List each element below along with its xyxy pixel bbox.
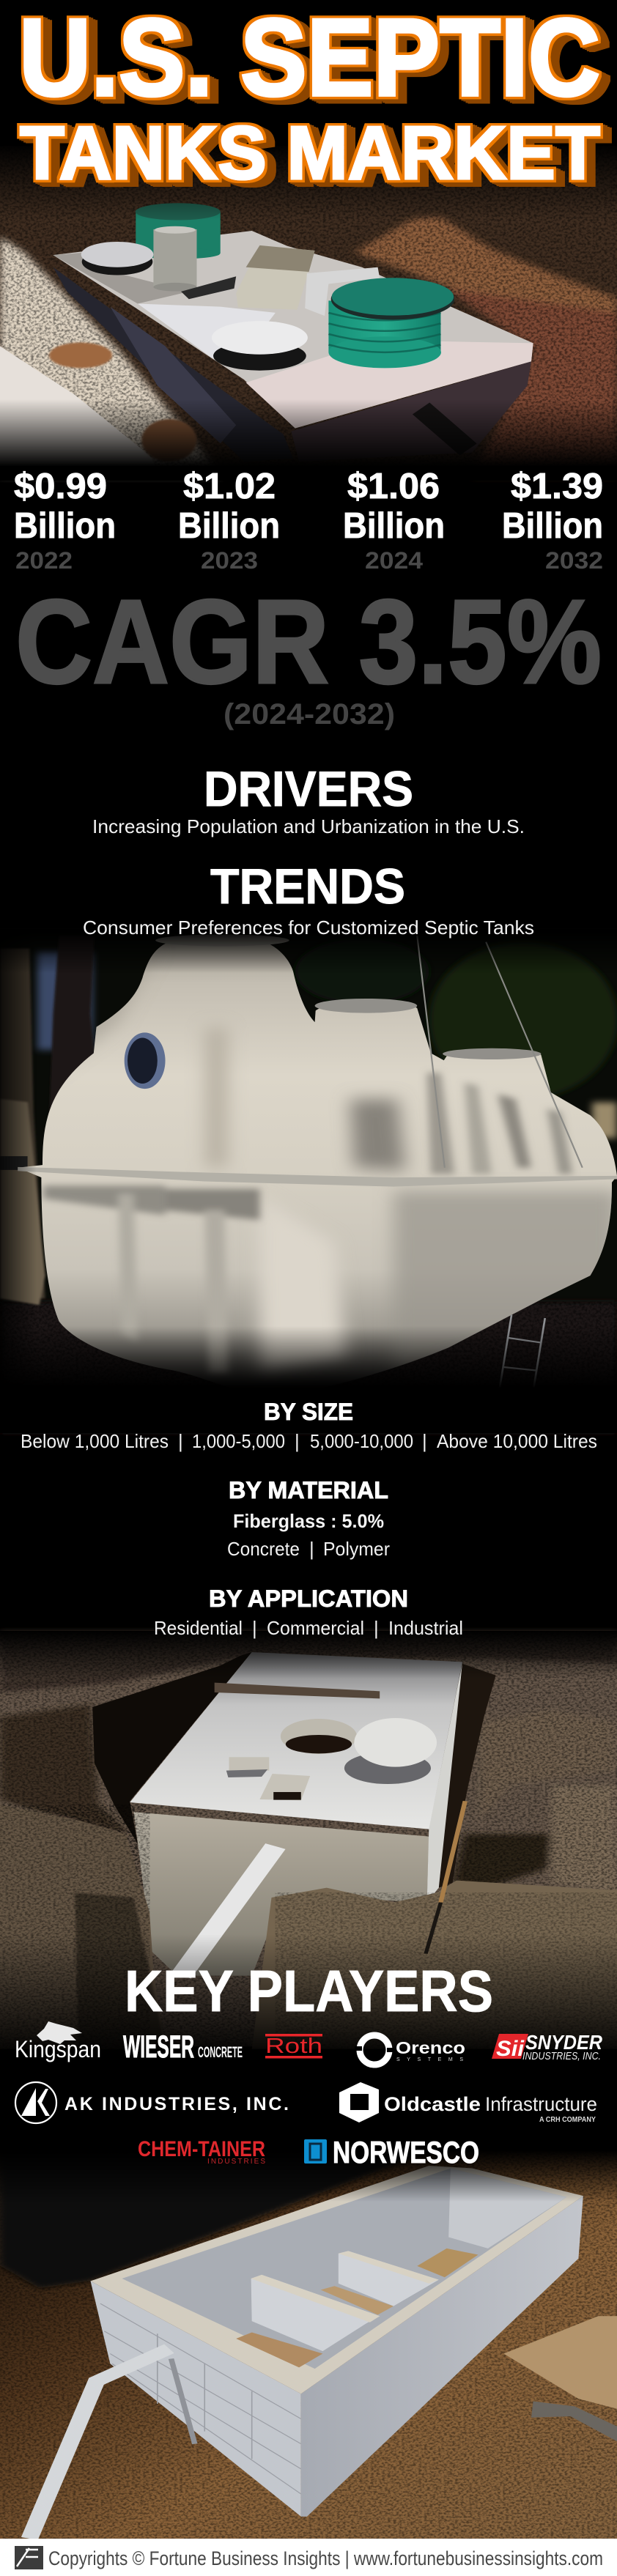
key players heading: KEY PLAYERS bbox=[125, 1958, 493, 2024]
segment: by size: | bbox=[422, 1430, 427, 1452]
fades bbox=[0, 1631, 617, 1679]
application items: Industrial bbox=[388, 1617, 463, 1639]
logo: Snyder Industries: INDUSTRIES, INC. bbox=[522, 2050, 601, 2062]
market values by year bbox=[14, 467, 603, 574]
logo: Snyder Industries: SNYDER bbox=[525, 2031, 603, 2054]
left wall bbox=[91, 2281, 301, 2517]
tank port bbox=[125, 1032, 166, 1089]
open box bbox=[236, 245, 315, 310]
value 2032: 2032 bbox=[545, 547, 603, 574]
fades bbox=[0, 929, 617, 973]
square openings bbox=[229, 1757, 269, 1771]
outlet pipe bbox=[421, 409, 468, 449]
fades bbox=[0, 143, 617, 220]
back left lid bbox=[82, 248, 152, 275]
application items: Residential bbox=[154, 1617, 243, 1639]
photo: septic tank in excavated soil bbox=[0, 143, 617, 481]
lifting cables bbox=[417, 936, 583, 1168]
segment: by material: | bbox=[309, 1538, 314, 1560]
CAGR period: (2024-2032) bbox=[223, 698, 395, 730]
value 2032 bbox=[502, 467, 603, 574]
logo: Wieser Concrete: WIESER bbox=[123, 2029, 194, 2065]
logo: Snyder Industries bbox=[492, 2031, 603, 2062]
logo: Norwesco bbox=[304, 2135, 479, 2169]
logo: Snyder Industries: Sii bbox=[496, 2037, 525, 2061]
segment: by material bbox=[227, 1477, 390, 1560]
segment: by size: Below 1,000 Litres bbox=[21, 1430, 169, 1452]
trends text: Consumer Preferences for Customized Septic Tanks bbox=[83, 917, 534, 939]
photo: block septic tank under construction bbox=[0, 2150, 617, 2539]
logo: Oldcastle Infrastructure bbox=[339, 2082, 597, 2124]
logo: Oldcastle Infrastructure: Oldcastle bbox=[384, 2093, 481, 2115]
application items: Commercial bbox=[267, 1617, 364, 1639]
tank risers bbox=[315, 999, 417, 1013]
segment: by size: 1,000-5,000 bbox=[192, 1430, 285, 1452]
marker stick bbox=[440, 1801, 465, 1903]
front lid bbox=[213, 341, 306, 371]
logo: Wieser Concrete: CONCRETE bbox=[198, 2044, 243, 2061]
segment: by size: Above 10,000 Litres bbox=[437, 1430, 597, 1452]
title bbox=[19, 0, 600, 195]
plank on soil bbox=[503, 2316, 617, 2409]
silver cylinder bbox=[153, 229, 196, 287]
logo: AK Industries bbox=[15, 2082, 289, 2123]
photo: concrete septic tank in trench bbox=[0, 1631, 617, 2073]
segment: by material: Fiberglass : 5.0% bbox=[233, 1510, 384, 1532]
front green riser bbox=[328, 300, 440, 352]
value 2023 bbox=[178, 467, 280, 574]
logos bbox=[15, 2021, 603, 2169]
dark soil behind tank bbox=[0, 2151, 433, 2289]
trench shadows bbox=[92, 1652, 252, 1844]
logo: Orenco Systems: SYSTEMS bbox=[396, 2057, 463, 2062]
logo: Kingspan bbox=[15, 2021, 101, 2062]
logo: Roth: Roth bbox=[265, 2035, 322, 2058]
baffle walls bbox=[251, 2275, 380, 2351]
tank shading bbox=[43, 949, 617, 1374]
value 2032: Billion bbox=[502, 506, 603, 546]
lid bbox=[354, 1718, 437, 1767]
pipe bbox=[29, 2349, 169, 2539]
value 2022: Billion bbox=[14, 506, 116, 546]
tree trunks bbox=[0, 936, 95, 1305]
segment: by material: BY MATERIAL bbox=[229, 1477, 388, 1503]
photo: fiberglass septic tank hanging from cables bbox=[0, 929, 617, 1433]
value 2024: 2024 bbox=[365, 547, 423, 574]
interior wall bbox=[122, 2168, 566, 2369]
tank side bbox=[427, 1663, 462, 1903]
logo: Orenco Systems: Orenco bbox=[396, 2038, 465, 2057]
pipe bbox=[181, 1846, 276, 1976]
rim bbox=[91, 2166, 583, 2394]
lid shadow bbox=[344, 1753, 431, 1784]
soil in front bbox=[252, 1881, 617, 2049]
value 2022: $0.99 bbox=[14, 467, 107, 506]
value 2022 bbox=[14, 467, 116, 574]
application items: | bbox=[374, 1617, 379, 1639]
segment: by material: Concrete bbox=[227, 1538, 300, 1560]
segment: by application: BY APPLICATION bbox=[209, 1585, 408, 1612]
dark pipes by box bbox=[181, 276, 236, 299]
tank body bbox=[18, 937, 617, 1398]
tank top slab bbox=[53, 231, 533, 428]
tank side wall bbox=[53, 267, 293, 462]
segment: by size: | bbox=[295, 1430, 300, 1452]
tank flange bbox=[18, 1167, 617, 1187]
logo: Kingspan: Kingspan bbox=[15, 2036, 101, 2062]
footer bbox=[0, 2539, 617, 2576]
segment: by size: | bbox=[178, 1430, 183, 1452]
segment: by size bbox=[21, 1399, 597, 1452]
logo: AK Industries: AK INDUSTRIES, INC. bbox=[64, 2094, 289, 2114]
fade bbox=[0, 2150, 617, 2202]
water compartments bbox=[236, 2332, 322, 2367]
application items bbox=[154, 1617, 463, 1639]
logo: Chem-Tainer: CHEM-TAINER bbox=[138, 2137, 265, 2161]
logo: Norwesco: NORWESCO bbox=[333, 2135, 479, 2169]
drivers heading: DRIVERS bbox=[204, 761, 413, 817]
logo: Chem-Tainer: INDUSTRIES bbox=[207, 2158, 265, 2166]
value 2032: $1.39 bbox=[511, 467, 603, 506]
value 2023: 2023 bbox=[201, 547, 258, 574]
logo: Oldcastle Infrastructure: A CRH COMPANY bbox=[539, 2116, 596, 2124]
level tool bbox=[215, 1683, 380, 1698]
value 2023: $1.02 bbox=[183, 467, 276, 506]
back green riser bbox=[136, 212, 221, 253]
footer logo bbox=[15, 2546, 43, 2569]
segment: by size: 5,000-10,000 bbox=[310, 1430, 413, 1452]
application items: | bbox=[252, 1617, 257, 1639]
value 2023: Billion bbox=[178, 506, 280, 546]
value 2024 bbox=[343, 467, 445, 574]
title: TANKS MARKET bbox=[20, 111, 600, 195]
value 2022: 2022 bbox=[15, 547, 73, 574]
value 2024: $1.06 bbox=[347, 467, 440, 506]
right wall bbox=[301, 2196, 583, 2517]
hole in lid bbox=[281, 1719, 357, 1754]
ladder bbox=[498, 1315, 545, 1403]
drivers text: Increasing Population and Urbanization in the U.S. bbox=[92, 815, 525, 837]
logo: Oldcastle Infrastructure: Infrastructure bbox=[485, 2093, 597, 2115]
trends heading: TRENDS bbox=[210, 859, 405, 914]
segment: by material: Polymer bbox=[323, 1538, 390, 1560]
tank front face bbox=[134, 1812, 429, 1976]
value 2024: Billion bbox=[343, 506, 445, 546]
segment: by size: BY SIZE bbox=[264, 1399, 353, 1425]
tank top bbox=[130, 1652, 462, 1829]
logo: Orenco Systems bbox=[355, 2035, 465, 2065]
